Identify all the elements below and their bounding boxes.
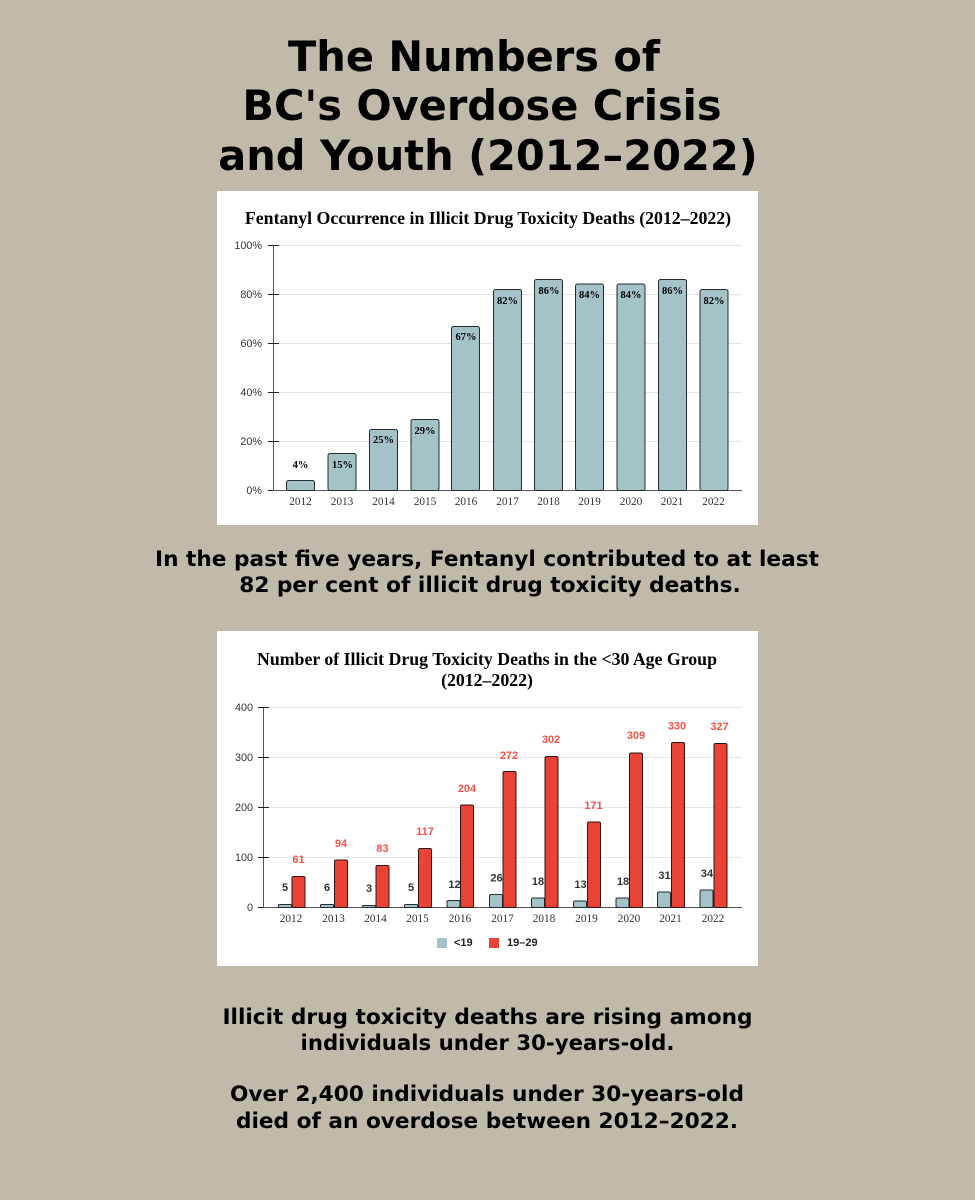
gridlines and y axis: fentanyl: 20% [240,436,262,448]
chart title: deaths [257,649,717,691]
value labels: under 19: 12 [448,879,461,891]
gridlines and y axis: deaths: 100 [235,852,253,864]
gridlines and y axis: fentanyl [234,240,742,497]
value labels: fentanyl: 84% [579,290,600,301]
value labels: fentanyl: 86% [538,286,560,297]
legend: 19–29 [507,937,538,949]
title: BC's Overdose Crisis [242,81,722,130]
value labels: under 19: 5 [408,882,414,894]
x axis labels: fentanyl: 2017 [496,496,519,508]
x axis labels: fentanyl: 2019 [578,496,601,508]
x axis labels: fentanyl: 2020 [620,496,643,508]
gridlines and y axis: fentanyl: 40% [240,387,262,399]
text: rising deaths [222,1005,753,1056]
value labels: under 19: 3 [366,883,372,895]
legend: <19 [454,937,473,949]
chart title: fentanyl: Fentanyl Occurrence in Illicit Drug Toxicity Deaths (2012–2022) [245,208,731,229]
gridlines and y axis: deaths [235,702,742,914]
value labels: under 19: 26 [490,872,503,884]
value labels: fentanyl: 29% [414,426,436,437]
x axis labels: deaths: 2018 [533,913,556,925]
chart title: deaths: Number of Illicit Drug Toxicity Deaths in the <30 Age Group [257,649,717,669]
value labels: 19 to 29: 272 [500,750,518,762]
value labels: 19 to 29 [292,720,729,866]
value labels: under 19: 31 [658,870,671,882]
value labels: under 19: 5 [282,882,288,894]
x axis labels: deaths: 2016 [449,913,472,925]
text: fentanyl finding: In the past five years, Fentanyl contributed to at least [155,547,819,572]
text: fentanyl finding [155,547,819,598]
gridlines and y axis: fentanyl: 60% [240,338,262,350]
legend [437,937,538,949]
bars: under 19 [278,890,713,908]
x axis labels: fentanyl [289,496,725,508]
text: rising deaths: individuals under 30-years-old. [301,1031,674,1056]
value labels: fentanyl: 84% [620,290,642,301]
gridlines and y axis: fentanyl: 80% [240,289,262,301]
x axis labels: fentanyl: 2014 [372,496,395,508]
x axis labels: fentanyl: 2018 [537,496,560,508]
gridlines and y axis: deaths: 300 [235,752,253,764]
value labels: under 19: 34 [701,868,714,880]
panel: fentanyl chart [217,191,758,525]
x axis labels: fentanyl: 2015 [414,496,437,508]
x axis labels: deaths: 2017 [491,913,514,925]
gridlines and y axis: fentanyl: 100% [234,240,262,252]
x axis labels: fentanyl: 2021 [661,496,683,508]
value labels: 19 to 29: 94 [335,838,348,850]
x axis labels: deaths: 2021 [659,913,682,925]
x axis labels: fentanyl: 2013 [331,496,354,508]
bars: fentanyl occurrence [286,280,728,490]
value labels: fentanyl: 15% [332,460,353,471]
value labels: 19 to 29: 171 [584,800,603,812]
value labels: 19 to 29: 302 [542,734,560,746]
chart title: deaths: (2012–2022) [441,670,533,691]
value labels: 19 to 29: 327 [710,721,729,733]
text: total deaths [230,1082,744,1134]
value labels: fentanyl: 4% [293,460,308,471]
gridlines and y axis: deaths: 0 [247,902,253,914]
text: fentanyl finding: 82 per cent of illicit drug toxicity deaths. [239,573,741,598]
text: rising deaths: Illicit drug toxicity deaths are rising among [222,1005,753,1030]
value labels: under 19: 13 [574,879,587,891]
value labels: 19 to 29: 83 [376,843,389,855]
x axis labels: fentanyl: 2016 [455,496,478,508]
gridlines and y axis: fentanyl: 0% [246,485,262,497]
x axis labels: deaths: 2013 [322,913,345,925]
x axis labels: deaths: 2014 [364,913,387,925]
panel: deaths chart [217,631,758,966]
x axis labels: deaths: 2012 [280,913,303,925]
title: and Youth (2012–2022) [218,131,758,180]
x axis labels: deaths: 2020 [618,913,641,925]
value labels: under 19: 18 [617,876,629,888]
value labels: 19 to 29: 309 [627,730,645,742]
title [218,32,758,180]
gridlines and y axis: deaths: 400 [235,702,253,714]
value labels: fentanyl: 82% [497,296,518,307]
bars: 19 to 29 [292,742,727,908]
title: The Numbers of [288,32,661,81]
value labels: fentanyl: 25% [373,435,394,446]
value labels: 19 to 29: 204 [458,783,477,795]
value labels: under 19 [282,868,714,895]
value labels: under 19: 6 [324,882,330,894]
value labels: under 19: 18 [532,876,544,888]
value labels: 19 to 29: 117 [416,826,434,838]
gridlines and y axis: deaths: 200 [235,802,253,814]
x axis labels: deaths: 2015 [406,913,429,925]
value labels: 19 to 29: 61 [292,854,305,866]
x axis labels: fentanyl: 2012 [289,496,312,508]
value labels: fentanyl: 86% [662,286,683,297]
x axis labels: deaths [280,913,725,925]
x axis labels: deaths: 2019 [575,913,598,925]
text: total deaths: Over 2,400 individuals under 30-years-old [230,1082,744,1107]
x axis labels: deaths: 2022 [702,913,725,925]
value labels: fentanyl: 82% [704,296,724,307]
x axis labels: fentanyl: 2022 [702,496,725,508]
value labels: fentanyl: 67% [456,332,476,343]
text: total deaths: died of an overdose between 2012–2022. [236,1109,738,1134]
value labels: fentanyl [293,286,724,471]
value labels: 19 to 29: 330 [668,720,686,732]
